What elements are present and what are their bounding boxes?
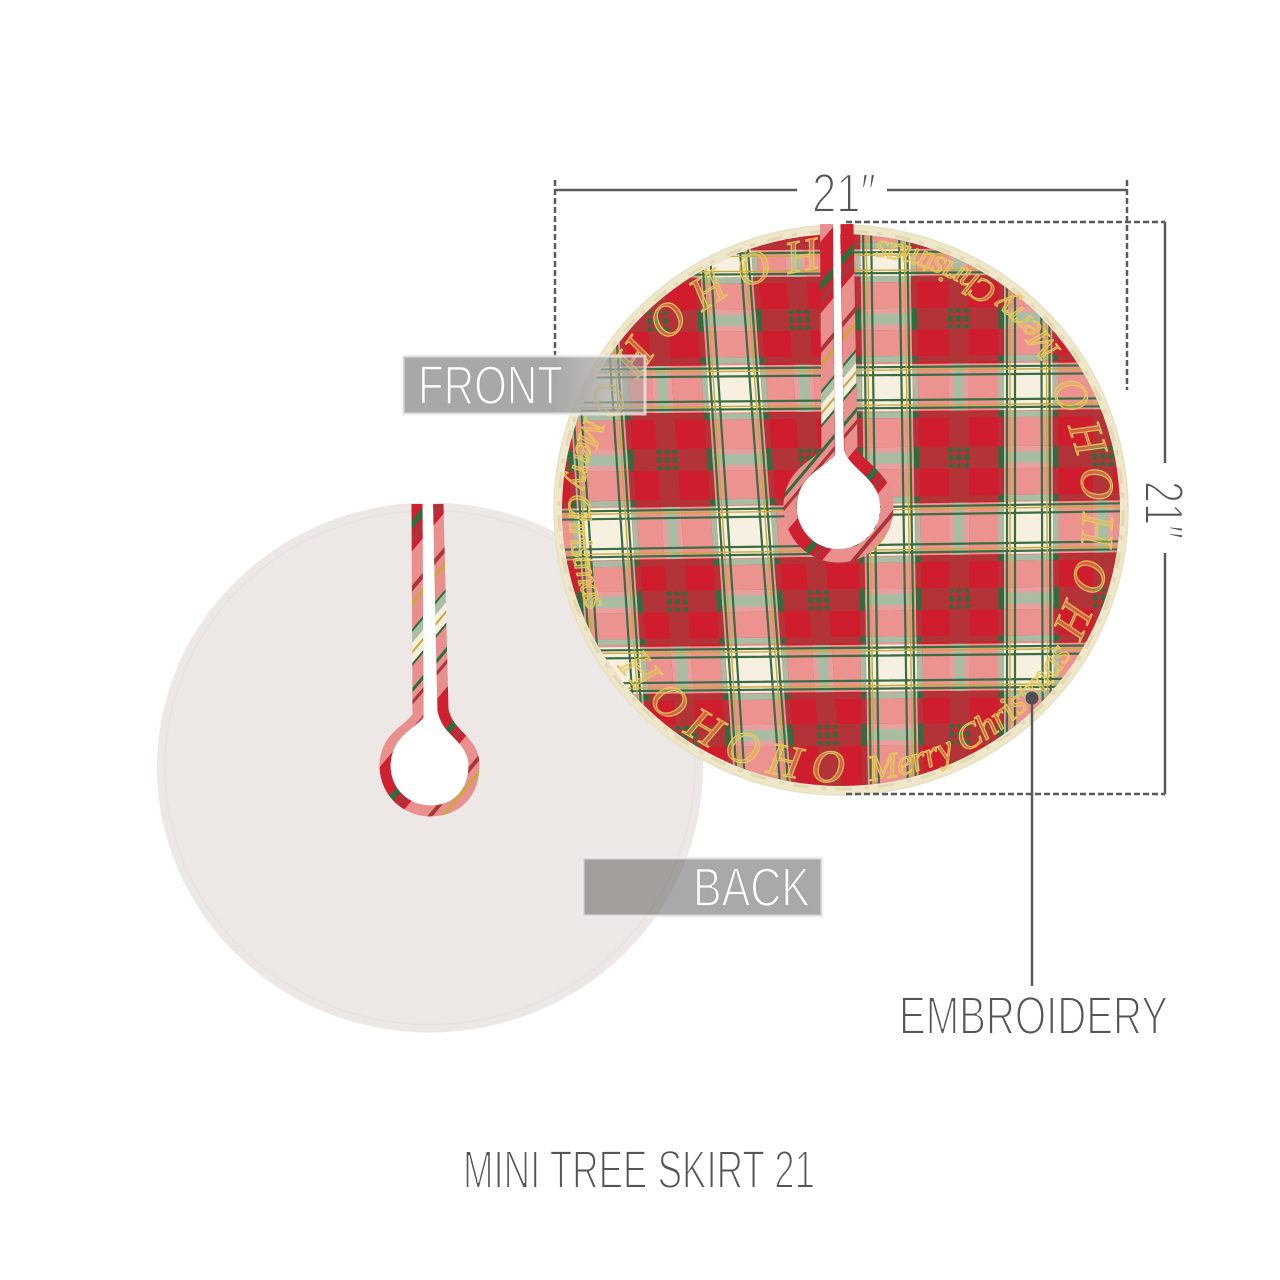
- label: BACK: [583, 856, 822, 918]
- embroidery: Ho Ho Ho right: HOHOHO: [1054, 380, 1114, 644]
- front skirt: [553, 224, 1129, 796]
- title: MINI TREE SKIRT 21: [463, 1140, 815, 1200]
- plaid fabric: [562, 234, 1120, 786]
- embroidery: Merry Christmas upper right: Merry Christmas: [874, 240, 1062, 362]
- embroidery: Merry Christmas bottom: Merry Christmas: [868, 644, 1070, 782]
- back skirt: [157, 500, 703, 1032]
- callout: embroidery: [899, 692, 1168, 1046]
- gold embroidery: [564, 237, 1114, 783]
- slit and neck trim: [790, 224, 887, 556]
- embroidery: Ho Ho Ho upper left: HOHOHO: [593, 237, 818, 417]
- label: FRONT: FRONT: [418, 354, 563, 416]
- back skirt fabric: [157, 502, 703, 1032]
- embroidery: Merry Christmas left: Merry Christmas: [564, 416, 605, 609]
- height dimension: [846, 222, 1195, 794]
- width dimension: [555, 162, 1127, 392]
- slit and neck opening: [797, 220, 880, 549]
- front skirt gold trim: [554, 225, 1128, 795]
- callout label: EMBROIDERY: [899, 986, 1168, 1046]
- width guide lines: [555, 180, 1127, 392]
- back slit trim: [385, 504, 474, 811]
- height guide lines: [846, 222, 1165, 794]
- label: BACK: BACK: [693, 856, 810, 918]
- width value: 21″: [812, 162, 876, 224]
- back slit and neck opening: [391, 500, 468, 805]
- callout dot: [1026, 692, 1038, 704]
- embroidery: Ho Ho Ho lower left: HOHOHO: [616, 650, 844, 783]
- height value: 21″: [1133, 481, 1195, 539]
- callout leader: [1031, 698, 1033, 986]
